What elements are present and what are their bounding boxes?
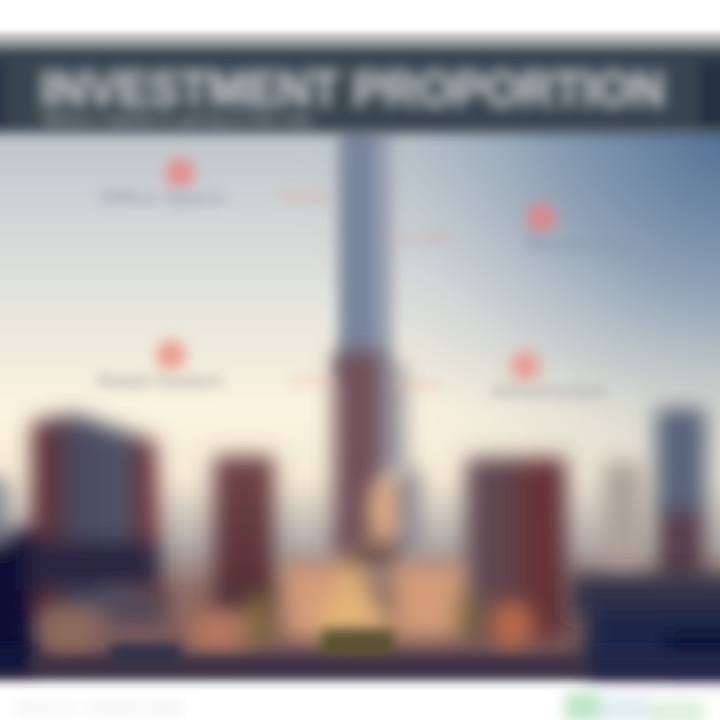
plaza centre glow <box>310 560 395 635</box>
building: right block <box>466 458 566 638</box>
central detail and plaza glow <box>38 470 534 652</box>
sky background <box>0 125 720 677</box>
footer: source note: Source: market data <box>14 699 184 716</box>
foreground: street edge <box>0 644 720 677</box>
plaza right lobe <box>395 565 463 637</box>
label: Residential <box>528 234 642 254</box>
label: Office Space <box>100 188 224 208</box>
plaza left lobe <box>285 565 347 637</box>
top margin soft edge <box>0 0 720 30</box>
icon: red marker <box>165 158 195 188</box>
connector arrow <box>395 382 440 388</box>
foreground: dark left edge <box>0 530 36 665</box>
building: far right tall tower <box>656 408 706 523</box>
connector arrow <box>280 196 330 198</box>
connector arrow <box>395 238 450 240</box>
central skyscraper upper shaft <box>338 130 394 380</box>
building: left block <box>32 414 160 610</box>
callout: lower left <box>98 340 335 391</box>
footer: logo <box>565 692 705 720</box>
foreground: central trees <box>322 630 394 658</box>
right forecourt <box>490 601 534 649</box>
label: Infrastructure <box>492 381 608 401</box>
callout: upper left <box>100 158 330 208</box>
building: far right pale tower <box>604 462 642 577</box>
title: INVESTMENT PROPORTION <box>40 61 665 117</box>
icon: red marker <box>156 340 186 370</box>
label: Retail Centers <box>98 371 222 391</box>
building: left centre <box>214 456 274 616</box>
foreground: right dark district <box>570 575 720 675</box>
buildings layer <box>0 352 706 665</box>
panel: city skyline scene <box>0 125 720 677</box>
header background <box>0 34 720 133</box>
connector arrow <box>290 377 335 383</box>
header band <box>0 34 720 133</box>
callout: lower right <box>395 351 608 401</box>
callout: upper right <box>395 203 642 254</box>
icon: red marker <box>526 203 556 233</box>
central warm wedge <box>368 478 400 542</box>
icon: red marker <box>510 351 540 381</box>
left forecourt <box>38 612 102 652</box>
subtitle: Where capital is going in the city <box>42 113 312 130</box>
building: central tower base <box>334 352 384 552</box>
